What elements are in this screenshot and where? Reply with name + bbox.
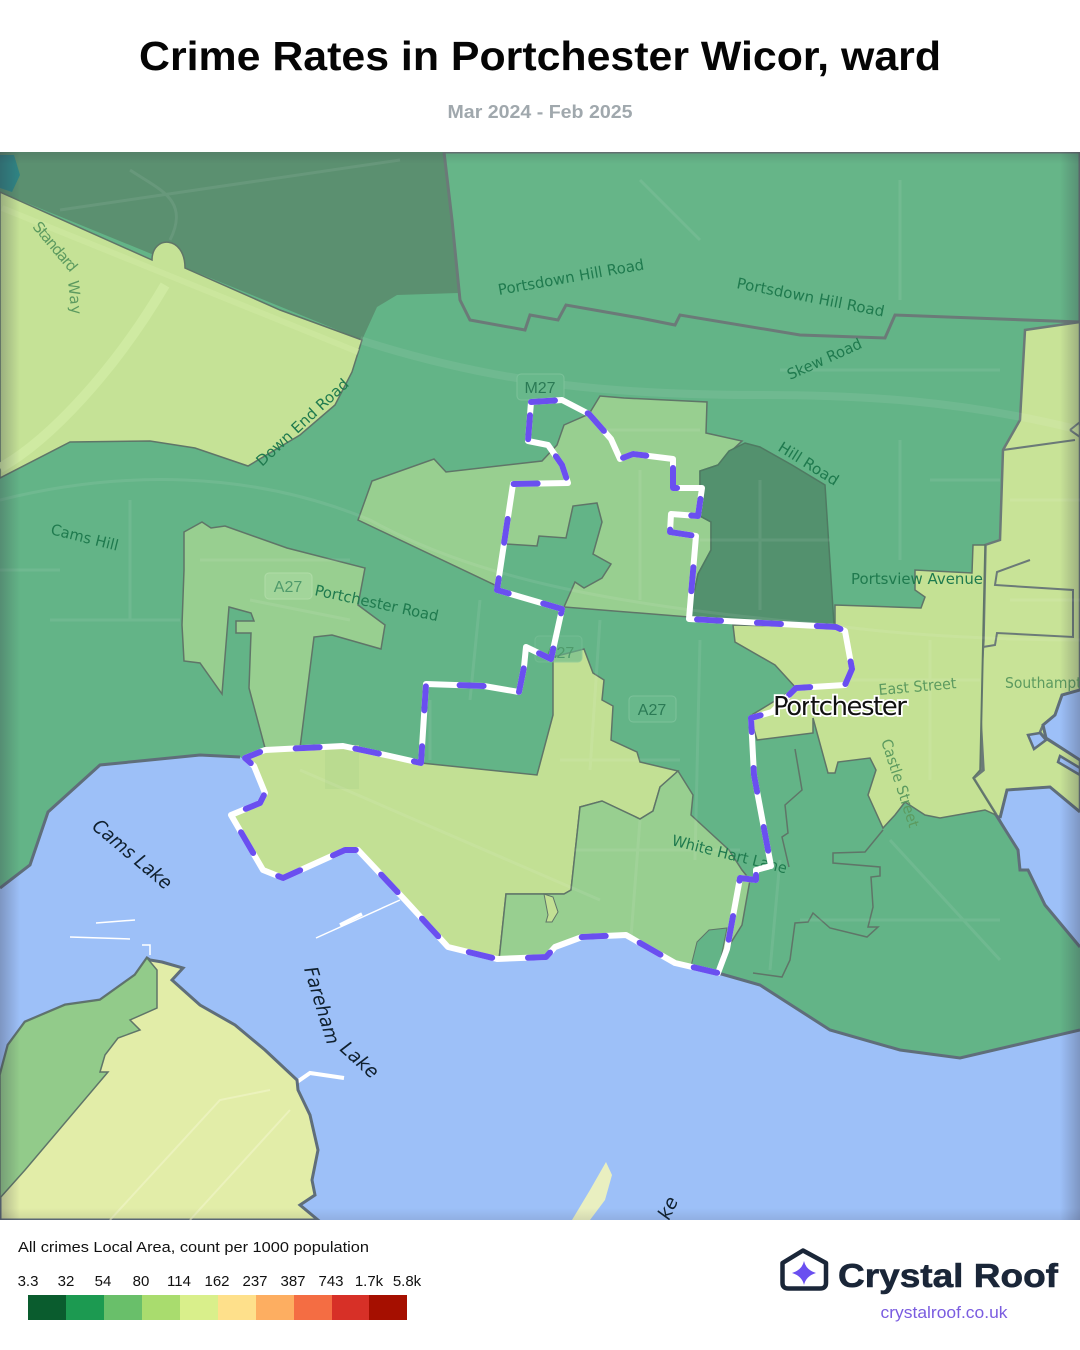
edge fade — [0, 152, 1080, 1220]
area: highest dark green block — [689, 443, 834, 625]
title: Crime Rates in Portchester Wicor, ward — [139, 33, 941, 79]
legend colour scale — [28, 1295, 407, 1320]
jetties — [70, 900, 400, 1082]
area: peninsula green — [0, 958, 157, 1198]
legend labels: 114 — [167, 1273, 191, 1290]
heavy boundary on east side — [973, 545, 996, 815]
water: east inlet — [1000, 787, 1080, 947]
website link: crystalroof.co.uk — [880, 1304, 1008, 1322]
road label: Skew Road: Skew Road — [784, 335, 865, 384]
legend labels: 743 — [318, 1273, 344, 1290]
area: north ward light green — [358, 396, 742, 617]
water label: Fareham Lake: Lake — [336, 1037, 383, 1083]
road label: East Street: East Street — [878, 674, 957, 699]
road label: White Hart Lane: White Hart Lane — [670, 831, 789, 877]
area: south-east ward light green — [499, 771, 750, 973]
road label: Down End Road: Down End Road — [252, 375, 352, 470]
area: Portchester yellow-green — [733, 545, 996, 828]
legend labels — [18, 1273, 422, 1290]
water label: Cams Lake: Cams Lake — [88, 815, 176, 894]
road label: Standard Way: Way — [64, 280, 85, 315]
road sign: M27: M27 — [524, 380, 556, 397]
legend labels: 237 — [242, 1273, 268, 1290]
road label: Portchester Road: Portchester Road — [313, 581, 440, 625]
land: island — [572, 1162, 612, 1220]
road sign: A27 east: A27 — [638, 702, 666, 719]
road label: Portsdown Hill Road west: Portsdown Hill Road — [497, 256, 645, 299]
area: small medium green at coast — [691, 928, 727, 973]
road label: Portsdown Hill Road east: Portsdown Hill Road — [735, 274, 886, 321]
inner area lines south-east — [753, 749, 883, 977]
land: south-west peninsula — [0, 958, 318, 1220]
area: top-right — [444, 152, 1080, 338]
area: west light green — [182, 522, 385, 748]
ward boundary — [231, 400, 852, 973]
logo icon: house with star — [782, 1250, 826, 1288]
legend labels: 1.7k — [355, 1273, 384, 1290]
logo wordmark: Crystal Roof — [838, 1257, 1059, 1294]
area: right yellow-green — [973, 322, 1080, 818]
legend title: All crimes Local Area, count per 1000 population — [18, 1239, 369, 1256]
road sign: M27 — [517, 374, 564, 400]
area: top-left low crime — [0, 152, 458, 340]
road: dual carriageway edge — [356, 349, 359, 355]
legend labels: 54 — [95, 1273, 111, 1290]
water label: Fareham Lake: Fareham — [299, 964, 344, 1047]
harbour pond and stripe — [1028, 733, 1080, 775]
road label: Cams Hill: Cams Hill — [49, 520, 120, 555]
faint paths on peninsula — [110, 1090, 290, 1220]
road sign: A27 west — [265, 573, 312, 599]
road sign: A27 west: A27 — [274, 579, 302, 596]
road label: Standard Way: Standard — [29, 218, 81, 276]
area: south ward yellow-green — [231, 649, 678, 960]
legend labels: 387 — [280, 1273, 306, 1290]
road label: Castle Street: Castle Street — [877, 737, 923, 830]
area: pond top-left — [0, 155, 20, 192]
place label: Portchester: Portchester — [773, 692, 907, 722]
coastline — [0, 690, 1080, 1058]
local road network — [0, 160, 1080, 970]
water — [0, 755, 1080, 1220]
legend labels: 162 — [204, 1273, 230, 1290]
road label: Hill Road: Hill Road — [775, 438, 842, 489]
road label: Portsview Avenue: Portsview Avenue — [851, 570, 983, 588]
legend labels: 32 — [58, 1273, 74, 1290]
legend labels: 3.3 — [18, 1273, 38, 1290]
area: left yellow-green — [0, 192, 362, 478]
legend labels: 5.8k — [393, 1273, 422, 1290]
road sign: A27 centre: A27 — [546, 645, 574, 662]
water label: partial lake: ke — [654, 1193, 683, 1223]
subtitle: date range: Mar 2024 - Feb 2025 — [448, 101, 632, 122]
road: curved slip road — [0, 285, 165, 468]
legend labels: 80 — [133, 1273, 149, 1290]
map base: medium crime area — [0, 198, 1080, 1056]
area: inlet drip — [544, 894, 558, 922]
road sign: A27 east — [629, 696, 676, 722]
road sign: A27 centre — [535, 636, 582, 662]
area: faint square — [353, 745, 359, 746]
road label: Standard Way — [33, 222, 80, 314]
water: north-east harbour — [1043, 690, 1080, 760]
water label: Fareham Lake — [299, 964, 383, 1083]
inner area lines east — [983, 422, 1080, 647]
choropleth map — [0, 152, 1080, 1223]
